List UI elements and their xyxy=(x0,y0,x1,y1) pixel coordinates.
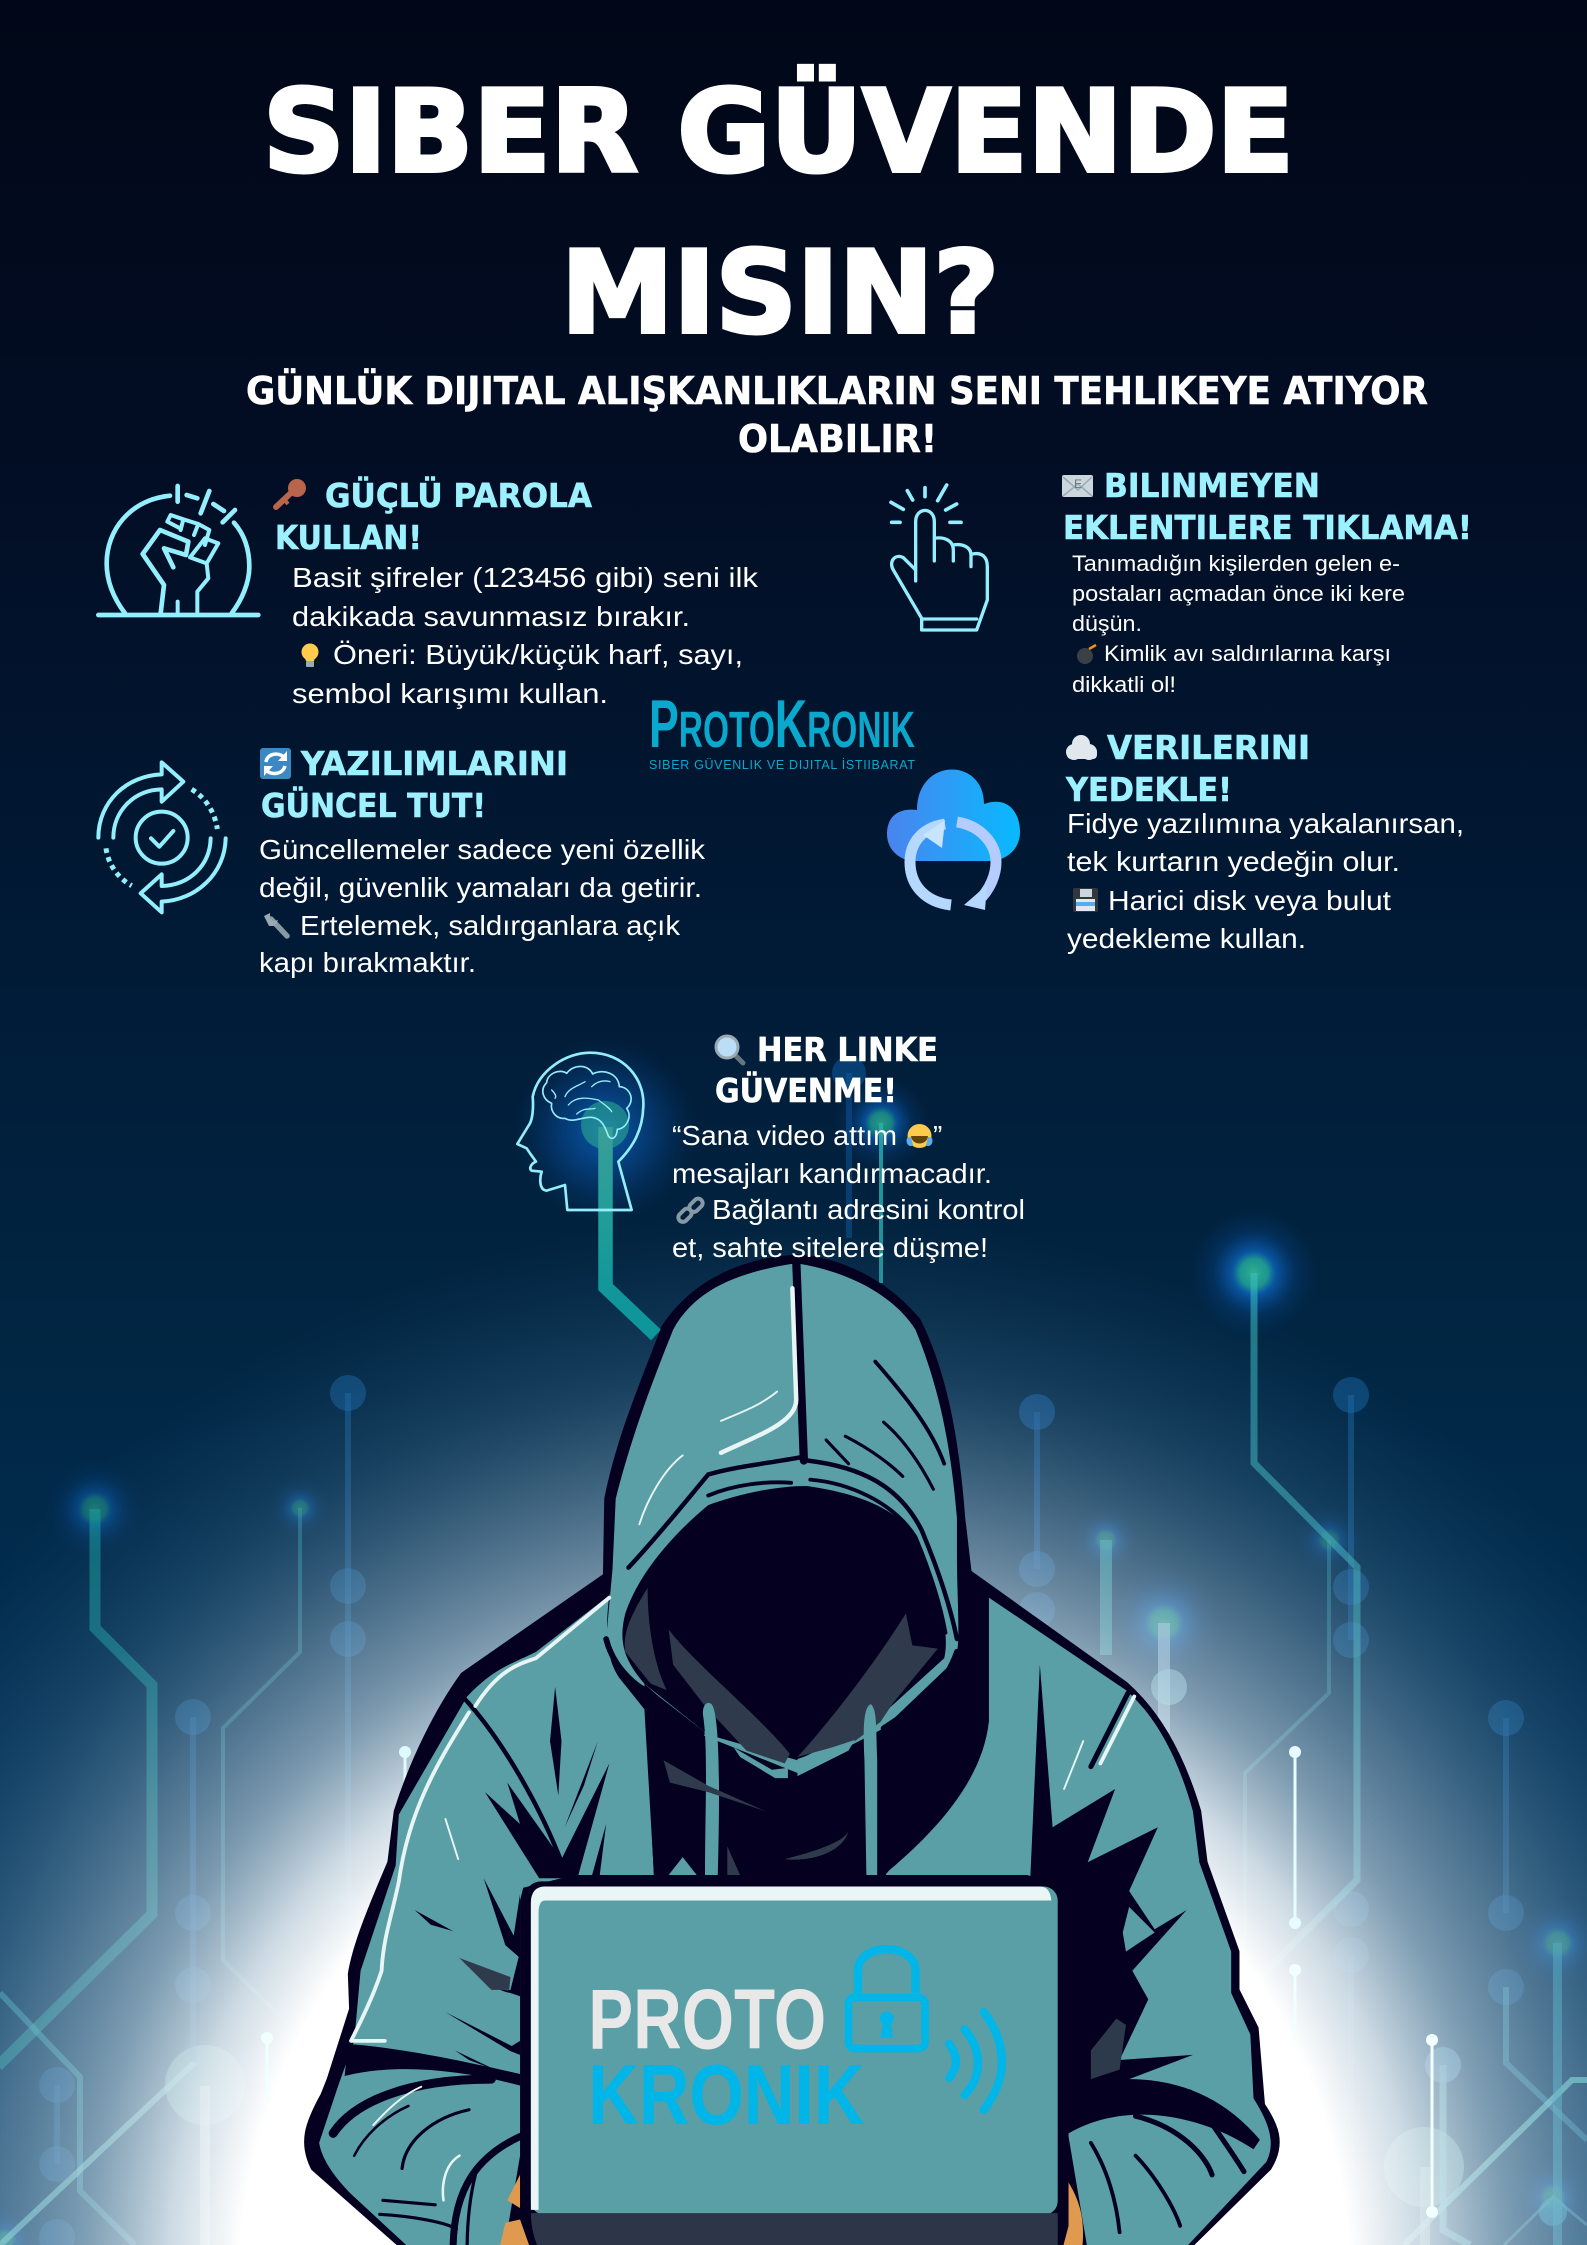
icon: cloud emoji xyxy=(1066,735,1097,760)
icon: laughing emoji xyxy=(907,1124,932,1148)
icon: pointing hand xyxy=(891,485,987,630)
body text: postaları açmadan önce iki kere xyxy=(1072,581,1405,606)
heading xyxy=(1065,728,1310,809)
body text: Kimlik avı saldırılarına karşı xyxy=(1104,641,1391,666)
white pin lines xyxy=(261,1746,1438,2218)
body text: Harici disk veya bulut xyxy=(1108,885,1391,916)
icon: raised fist xyxy=(98,486,258,615)
circuit traces and nodes: left xyxy=(0,1375,366,2245)
body text: Ertelemek, saldırganlara açık xyxy=(300,910,681,941)
body text: Bağlantı adresini kontrol xyxy=(712,1194,1025,1225)
body text: Tanımadığın kişilerden gelen e- xyxy=(1072,551,1400,576)
logo: ProtoKronik: SIBER GÜVENLIK VE DIJITAL İSTIIBARAT xyxy=(649,758,915,772)
panel: strong password xyxy=(275,475,759,709)
heading: GÜVENME! xyxy=(715,1070,897,1110)
heading: YAZILIMLARINI xyxy=(300,744,568,783)
body text: tek kurtarın yedeğin olur. xyxy=(1067,846,1400,877)
body text: yedekleme kullan. xyxy=(1067,923,1306,954)
icon: light bulb xyxy=(302,644,318,667)
heading xyxy=(275,475,592,557)
body text: et, sahte sitelere düşme! xyxy=(672,1232,988,1263)
icon: link xyxy=(677,1197,704,1224)
body text: “Sana video attım xyxy=(672,1120,897,1151)
body text xyxy=(259,834,706,978)
icon: floppy disk xyxy=(1073,888,1098,912)
body text: Fidye yazılımına yakalanırsan, xyxy=(1067,808,1464,839)
laptop logo xyxy=(588,1949,1002,2143)
body text: düşün. xyxy=(1072,611,1142,636)
heading xyxy=(261,744,568,825)
heading: KULLAN! xyxy=(275,518,422,557)
icon: envelope xyxy=(1062,475,1093,497)
laptop xyxy=(525,1881,1064,2245)
icon: head with brain xyxy=(517,1053,643,1210)
panel: unknown attachments xyxy=(1062,466,1472,697)
panel: back up your data xyxy=(1065,728,1464,954)
panel: don't trust every link xyxy=(672,1030,1025,1263)
icon: bomb xyxy=(1077,645,1096,664)
subtitle xyxy=(246,369,1428,461)
circuit traces and nodes: centre xyxy=(513,1038,1055,1628)
body text: dikkatli ol! xyxy=(1072,672,1176,697)
subtitle: OLABILIR! xyxy=(738,417,937,461)
body text xyxy=(672,1120,1025,1263)
heading: YEDEKLE! xyxy=(1065,770,1232,809)
title: MISIN? xyxy=(561,227,999,359)
heading xyxy=(1063,466,1472,547)
title xyxy=(263,66,1294,359)
heading xyxy=(715,1030,938,1110)
logo: ProtoKronik: PROTOKRONIK xyxy=(649,686,915,762)
illustration: hooded hacker with laptop xyxy=(306,1256,1278,2245)
heading: VERILERINI xyxy=(1107,728,1310,767)
icon: envelope: E xyxy=(1074,477,1082,491)
laptop logo: KRONIK xyxy=(588,2048,864,2143)
body text: değil, güvenlik yamaları da getirir. xyxy=(259,872,702,903)
heading: BILINMEYEN xyxy=(1104,466,1320,505)
icon: cloud sync xyxy=(887,769,1020,910)
panel: keep software updated xyxy=(259,744,706,978)
body text: ” xyxy=(933,1120,942,1151)
icon: wrench xyxy=(264,913,287,936)
icon: refresh emoji xyxy=(260,748,291,779)
body text: dakikada savunmasız bırakır. xyxy=(292,601,690,632)
body text xyxy=(1067,808,1464,954)
laptop logo: PROTO xyxy=(588,1973,826,2068)
body text: sembol karışımı kullan. xyxy=(292,678,608,709)
body text xyxy=(1072,551,1405,697)
body text: kapı bırakmaktır. xyxy=(259,947,476,978)
body text: Basit şifreler (123456 gibi) seni ilk xyxy=(292,562,759,593)
icon: key xyxy=(276,479,306,507)
heading: EKLENTILERE TIKLAMA! xyxy=(1063,508,1472,547)
title: SIBER GÜVENDE xyxy=(263,66,1294,198)
hands xyxy=(499,2175,1083,2245)
body text: Güncellemeler sadece yeni özellik xyxy=(259,834,706,865)
icon: refresh check xyxy=(98,762,226,912)
heading: HER LINKE xyxy=(757,1030,938,1069)
body text xyxy=(292,562,759,709)
subtitle: GÜNLÜK DIJITAL ALIŞKANLIKLARIN SENI TEHLIKEYE ATIYOR xyxy=(246,369,1428,413)
body text: mesajları kandırmacadır. xyxy=(672,1158,992,1189)
body text: Öneri: Büyük/küçük harf, sayı, xyxy=(333,639,743,670)
heading: GÜNCEL TUT! xyxy=(261,785,486,825)
icon: magnifying glass xyxy=(716,1036,743,1063)
circuit traces and nodes: right xyxy=(1072,1209,1587,2245)
heading: GÜÇLÜ PAROLA xyxy=(325,475,592,515)
